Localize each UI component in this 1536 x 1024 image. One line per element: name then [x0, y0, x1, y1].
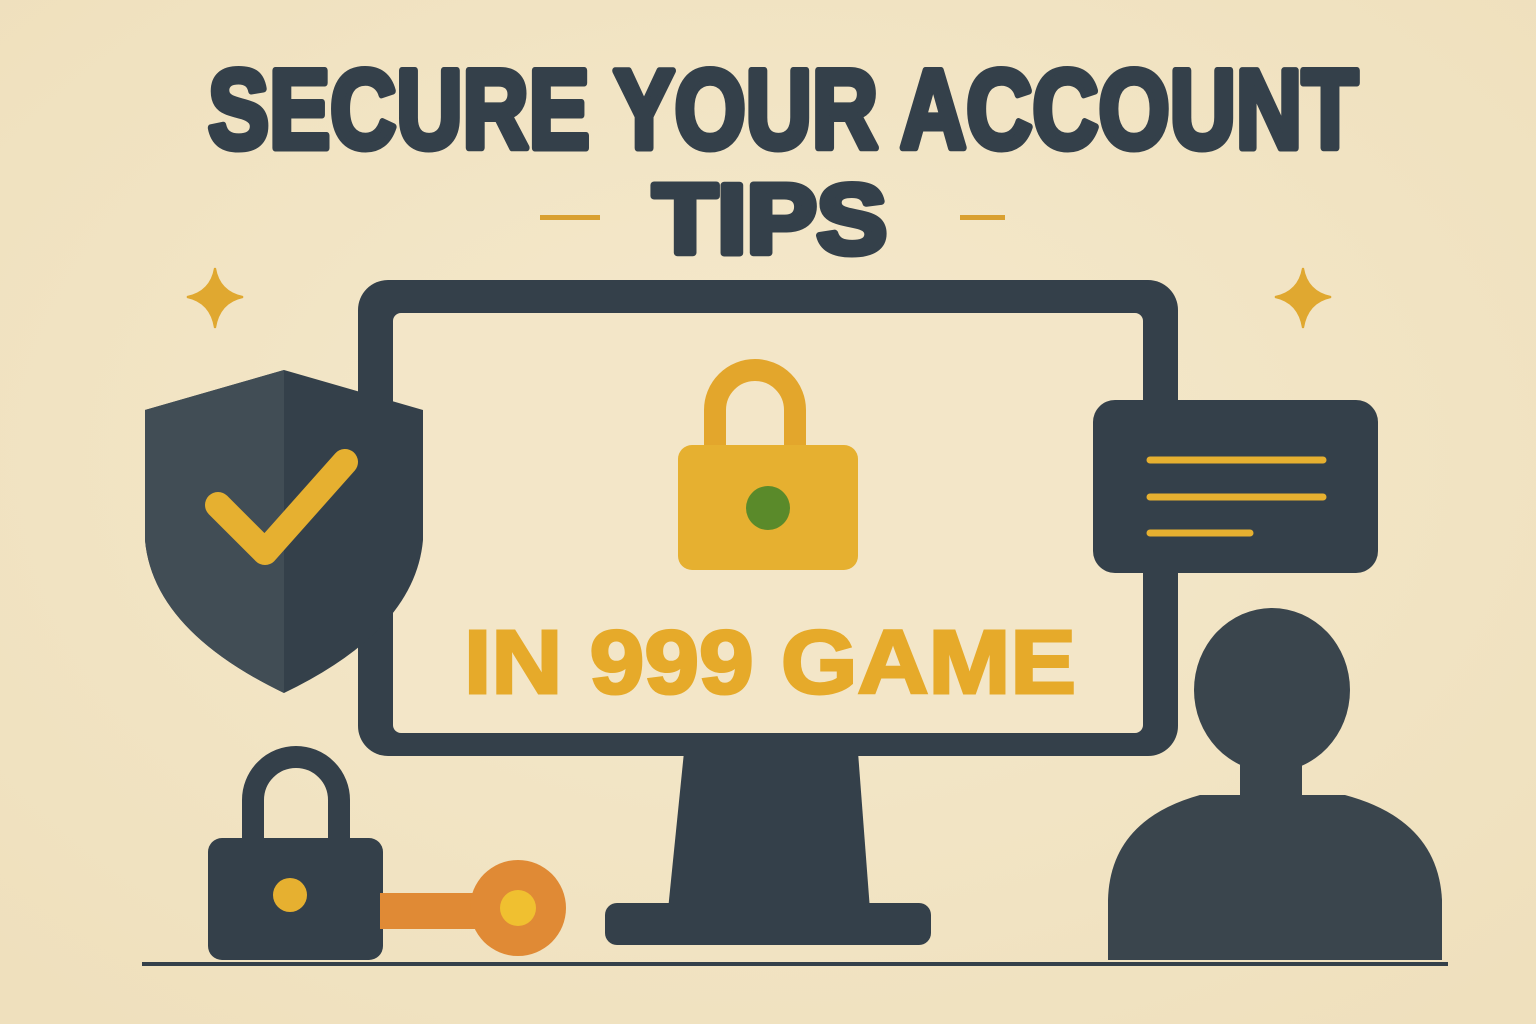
monitor: [358, 280, 1178, 945]
icon: shield with check: [145, 370, 423, 693]
title: [208, 47, 1358, 274]
icon: padlock on screen: [678, 370, 858, 570]
ground line: [142, 962, 1448, 966]
icon: small padlock: [208, 757, 383, 960]
icon: sparkle right: [1275, 268, 1331, 328]
icon: message box: [1093, 400, 1378, 573]
screen text: IN 999 GAME: [464, 613, 1076, 713]
title: TIPS: [653, 164, 887, 274]
icon: person: [1108, 608, 1442, 960]
icon: sparkle left: [187, 268, 243, 328]
title dashes: [540, 215, 1005, 220]
icon: key: [380, 860, 566, 956]
